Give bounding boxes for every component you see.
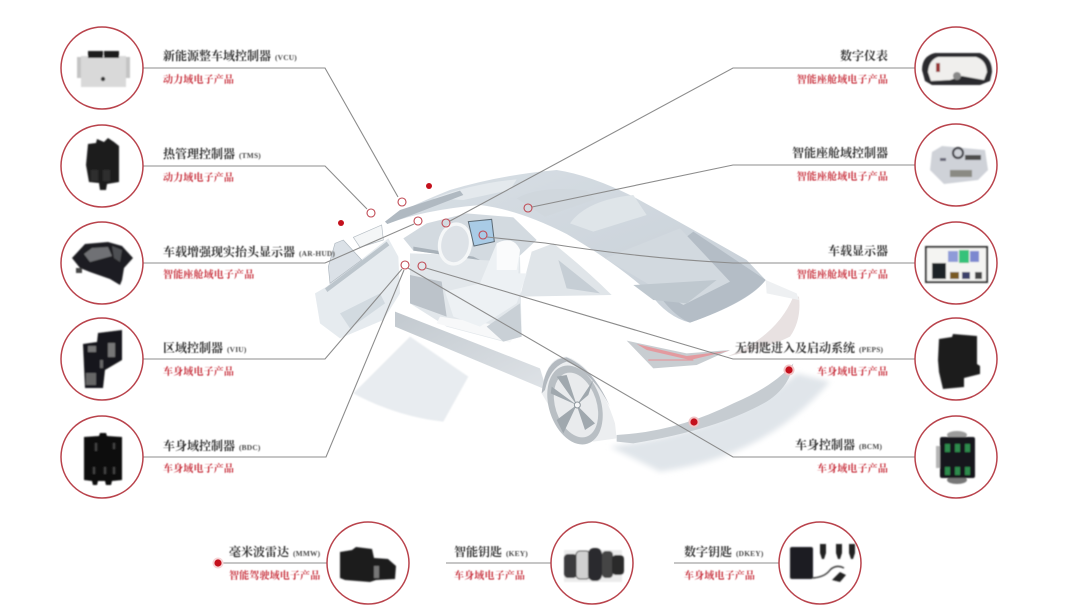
domain label: 智能座舱域电子产品 [163, 268, 254, 281]
side window [520, 243, 612, 297]
title: 智能钥匙 (KEY) [454, 544, 528, 559]
callout: TMS [61, 125, 367, 209]
leader line [143, 269, 402, 359]
product circle: in-car display [915, 222, 997, 304]
callout: BDC [61, 270, 404, 498]
product circle: TMS [61, 125, 143, 207]
title: 车载增强现实抬头显示器 (AR-HUD) [163, 244, 335, 259]
domain label: 动力域电子产品 [163, 73, 234, 86]
anchor dot [212, 558, 224, 568]
callout: VCU [61, 27, 398, 197]
domain label: 车身域电子产品 [454, 569, 525, 582]
leader line [143, 224, 414, 263]
callout: in-car display [487, 222, 997, 304]
callout: AR-HUD [61, 222, 414, 304]
product circle: smart key [551, 522, 633, 604]
domain label: 车身域电子产品 [163, 462, 234, 475]
domain label: 车身域电子产品 [817, 365, 888, 378]
leader line [674, 562, 779, 564]
tail light [627, 341, 730, 368]
product circle: BDC [61, 416, 143, 498]
leader line [143, 270, 404, 457]
leader line [143, 166, 367, 209]
product circle: PEPS [915, 318, 997, 400]
callout: smart key [446, 522, 633, 604]
leader line [408, 268, 915, 457]
ground shadows [353, 337, 830, 472]
title: 车载显示器 [828, 243, 888, 258]
leader line [426, 268, 915, 359]
product circle: AR-HUD [61, 222, 143, 304]
glass roof [385, 170, 766, 323]
domain label: 车身域电子产品 [684, 569, 755, 582]
title: 毫米波雷达 (MMW) [229, 544, 321, 559]
title: 热管理控制器 (TMS) [163, 146, 261, 161]
product circle: cockpit domain controller [915, 124, 997, 206]
callout: digital cluster [450, 27, 997, 221]
domain label: 智能座舱域电子产品 [797, 268, 888, 281]
open door [315, 225, 400, 338]
title: 新能源整车域控制器 (VCU) [163, 48, 297, 63]
title: 智能座舱域控制器 [792, 145, 888, 160]
domain label: 智能座舱域电子产品 [797, 170, 888, 183]
leader line [143, 68, 398, 197]
leader line [222, 562, 327, 564]
callout: BCM [408, 268, 997, 498]
title: 车身域控制器 (BDC) [163, 438, 261, 453]
rear wheel [538, 357, 617, 452]
location markers on car [338, 183, 794, 428]
domain label: 智能驾驶域电子产品 [229, 569, 320, 582]
leader line [446, 562, 551, 564]
callout: PEPS [426, 268, 997, 400]
domain label: 智能座舱域电子产品 [797, 73, 888, 86]
callout: MMW radar [212, 522, 409, 604]
title: 数字仪表 [840, 48, 888, 63]
interior [403, 213, 537, 343]
domain label: 车身域电子产品 [817, 462, 888, 475]
title: 无钥匙进入及启动系统 (PEPS) [735, 340, 884, 355]
car illustration [315, 170, 830, 472]
product circle: digital key [779, 522, 861, 604]
product circle: VIU [61, 318, 143, 400]
leader line [487, 237, 915, 263]
product circle: BCM [915, 416, 997, 498]
leader line [532, 165, 915, 207]
title: 区域控制器 (VIU) [163, 340, 247, 355]
product circle: digital cluster [915, 27, 997, 109]
callout: cockpit domain controller [532, 124, 997, 207]
domain label: 动力域电子产品 [163, 171, 234, 184]
domain label: 车身域电子产品 [163, 365, 234, 378]
title: 车身控制器 (BCM) [795, 437, 883, 452]
title: 数字钥匙 (DKEY) [684, 544, 764, 559]
callout: digital key [674, 522, 861, 604]
leader line [450, 68, 915, 221]
product circle: VCU [61, 27, 143, 109]
product circle: MMW radar [327, 522, 409, 604]
car body [395, 180, 799, 443]
callout: VIU [61, 269, 402, 400]
